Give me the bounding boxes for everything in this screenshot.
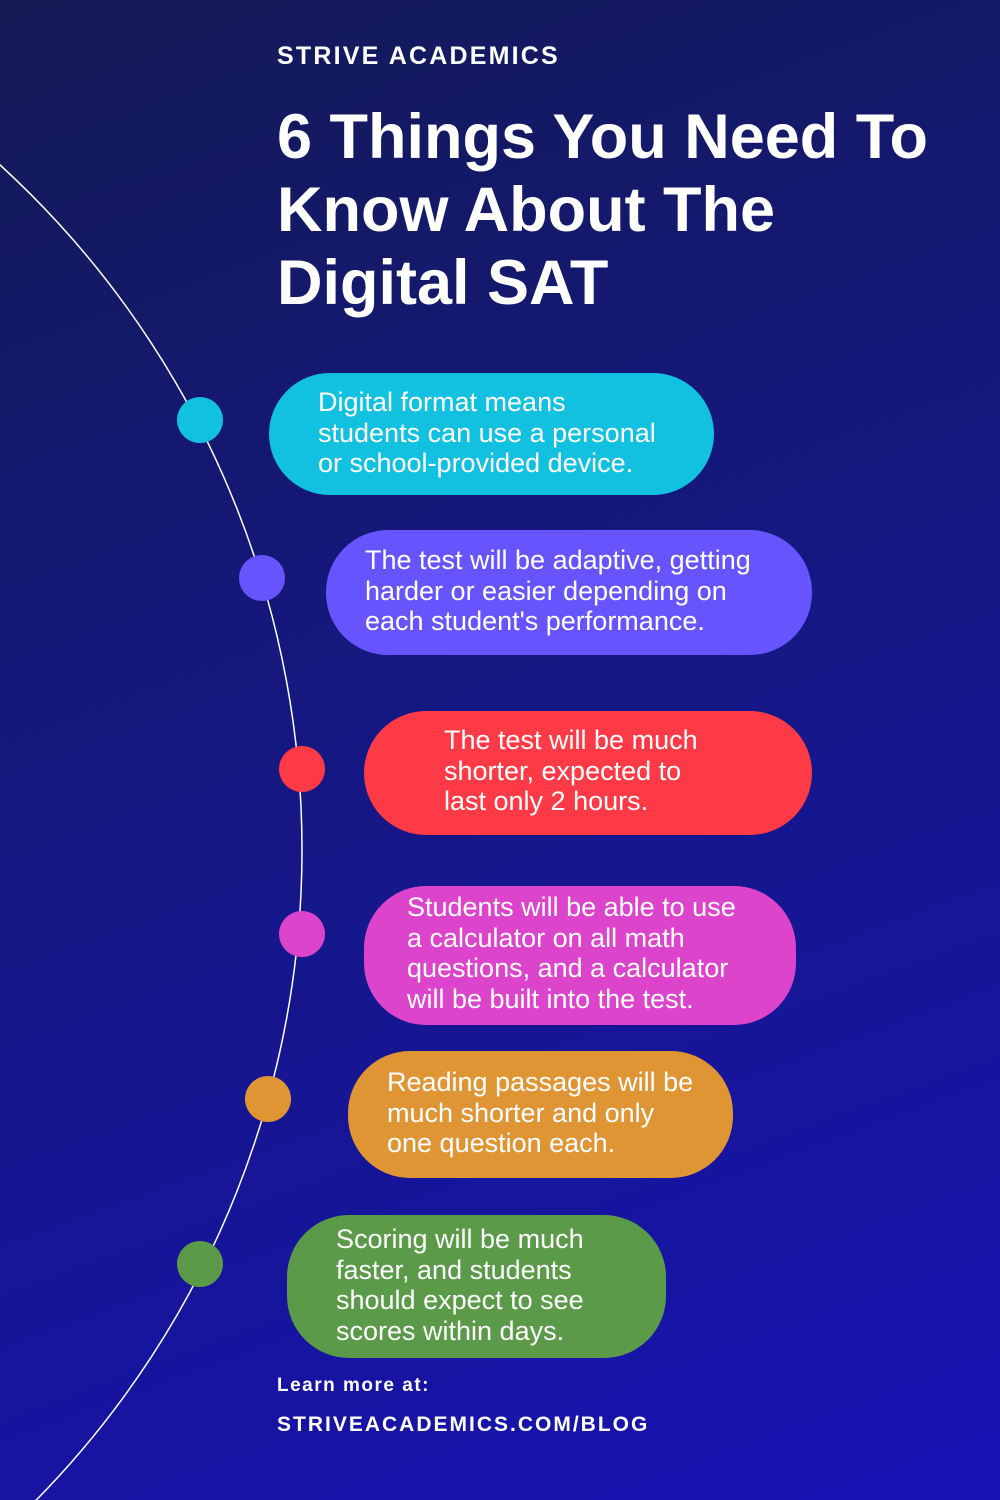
box 2: each student's performance. <box>365 606 705 636</box>
dot 5 <box>245 1076 291 1122</box>
box 1: or school-provided device. <box>318 448 633 478</box>
box 6 <box>287 1215 666 1358</box>
box 4 <box>364 886 796 1025</box>
box 2: The test will be adaptive, getting <box>365 545 751 575</box>
box 3: shorter, expected to <box>444 756 681 786</box>
box 3: last only 2 hours. <box>444 786 648 816</box>
title: 6 Things You Need To Know About The Digital SAT <box>277 102 928 318</box>
box 3 <box>364 711 812 835</box>
box 5: one question each. <box>387 1128 615 1158</box>
box 6: Scoring will be much <box>336 1224 584 1254</box>
box 3: The test will be much <box>444 725 698 755</box>
box 6: should expect to see <box>336 1285 584 1315</box>
box 4: a calculator on all math <box>407 923 685 953</box>
box 1 <box>269 373 714 495</box>
box 2: harder or easier depending on <box>365 576 727 606</box>
box 4: questions, and a calculator <box>407 953 728 983</box>
box 1: students can use a personal <box>318 418 656 448</box>
dot 1 <box>177 397 223 443</box>
dot 2 <box>239 555 285 601</box>
dot 6 <box>177 1241 223 1287</box>
box 1: Digital format means <box>318 387 566 417</box>
box 5 <box>348 1051 733 1178</box>
box 2 <box>326 530 812 655</box>
box 6: scores within days. <box>336 1316 564 1346</box>
dot 3 <box>279 746 325 792</box>
box 4: Students will be able to use <box>407 892 736 922</box>
box 5: Reading passages will be <box>387 1067 693 1097</box>
box 5: much shorter and only <box>387 1098 654 1128</box>
footer label: Learn more at: <box>277 1375 430 1396</box>
box 6: faster, and students <box>336 1255 572 1285</box>
box 4: will be built into the test. <box>407 984 694 1014</box>
dot 4 <box>279 911 325 957</box>
brand name: STRIVE ACADEMICS <box>277 42 560 70</box>
footer url: STRIVEACADEMICS.COM/BLOG <box>277 1413 649 1436</box>
